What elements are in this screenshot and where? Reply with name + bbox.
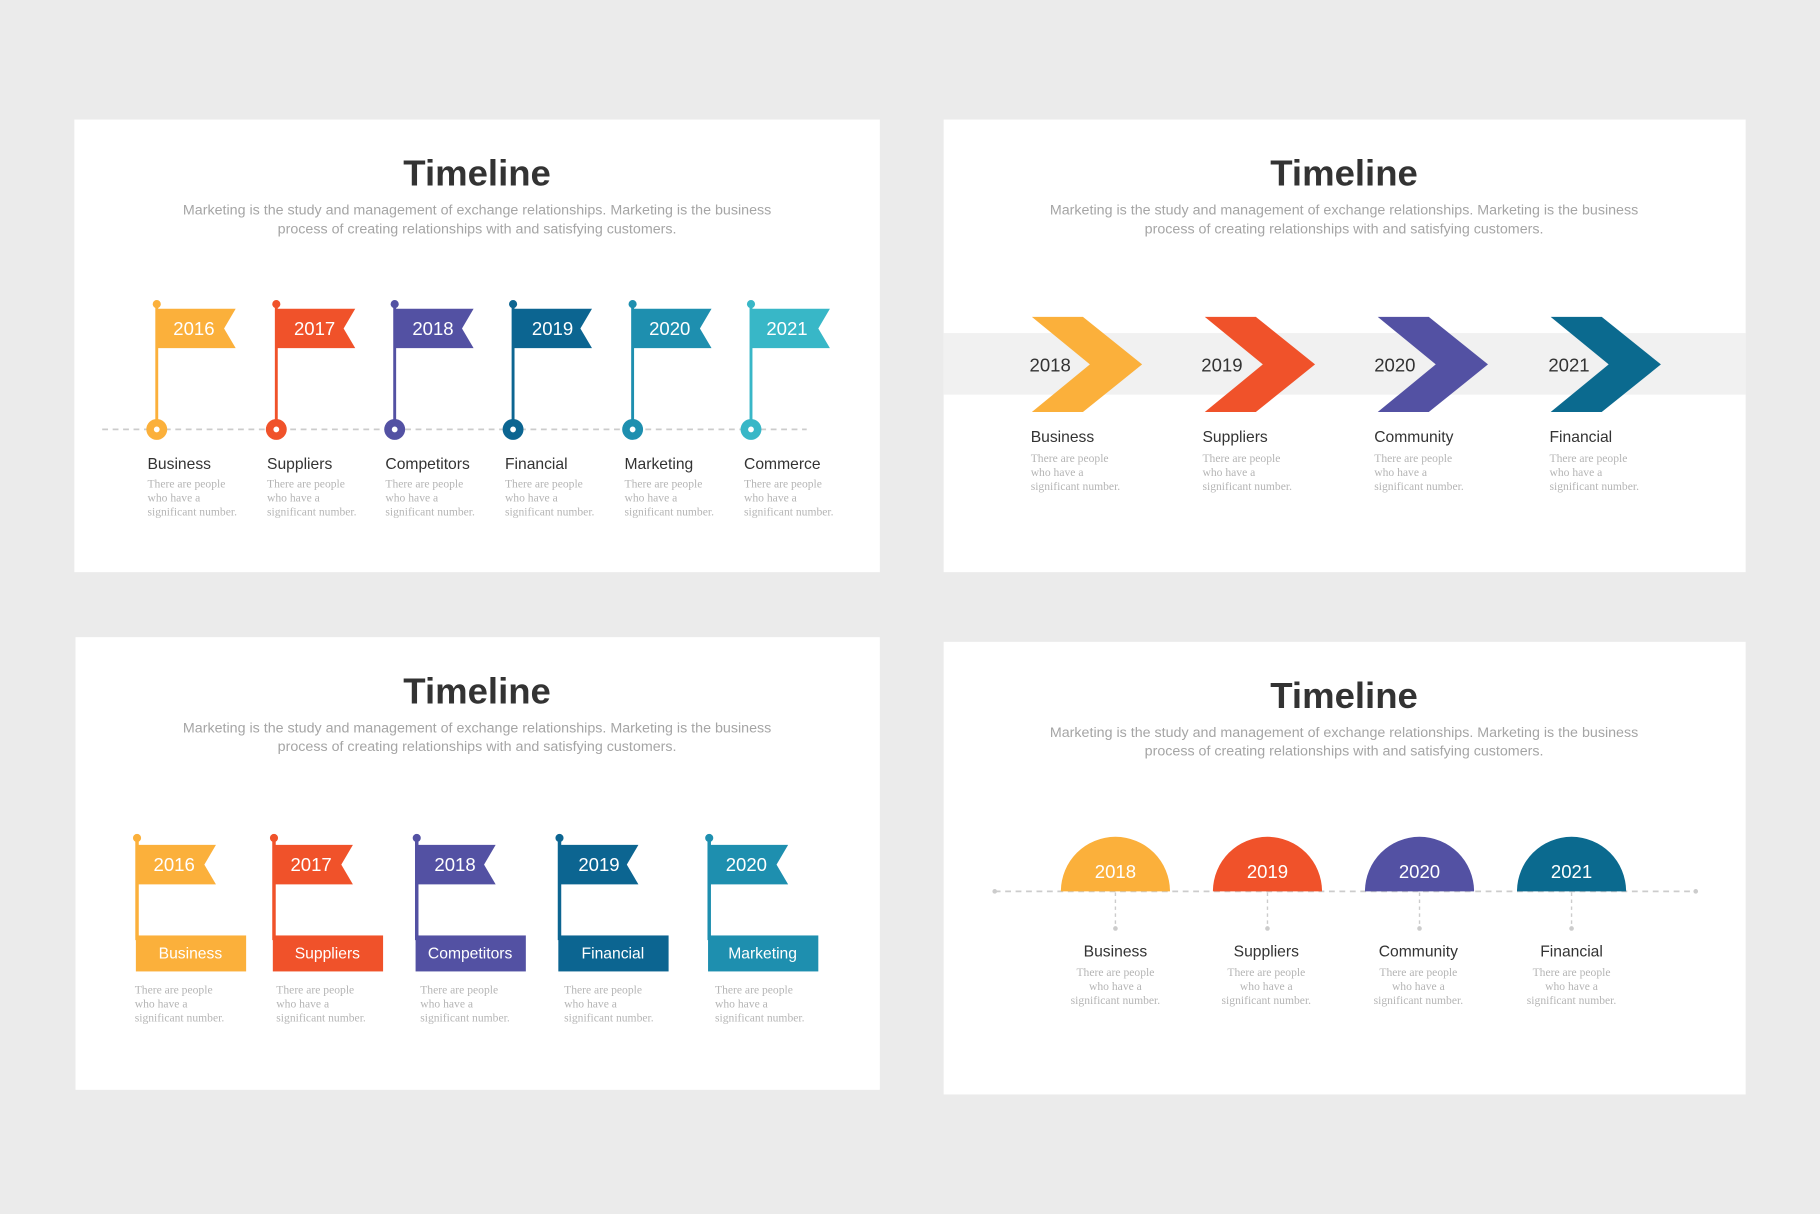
flag box 2020: There are people — [715, 983, 793, 996]
semicircle 2021: 2021 — [1551, 861, 1592, 882]
semicircle 2020 — [1365, 837, 1474, 1007]
flag box 2018 — [413, 834, 526, 1024]
semicircle 2019: Suppliers — [1234, 943, 1299, 960]
flag 2021: significant number. — [744, 505, 834, 518]
flag 2016 — [146, 300, 237, 518]
subtitle: Marketing is the study and management of exchange relationships. Marketing is the business — [183, 203, 771, 219]
flag box 2019 — [555, 834, 669, 1024]
semicircle 2018: who have a — [1089, 980, 1142, 993]
semicircle 2019: significant number. — [1222, 994, 1311, 1007]
chevron 2019: who have a — [1202, 466, 1255, 479]
flag box 2020: Marketing — [728, 946, 797, 963]
semicircle 2019: There are people — [1227, 966, 1305, 979]
flag box 2018: significant number. — [420, 1011, 510, 1024]
semicircle 2019: 2019 — [1247, 861, 1288, 882]
flag 2019: There are people — [505, 477, 583, 490]
flag box 2018: who have a — [420, 997, 473, 1010]
flag box 2017: significant number. — [276, 1011, 366, 1024]
flag box 2016: 2016 — [154, 854, 195, 875]
flag box 2020: significant number. — [715, 1011, 805, 1024]
flag 2021: There are people — [744, 477, 822, 490]
flag box 2016 — [133, 834, 246, 1024]
subtitle — [183, 203, 771, 237]
flag 2019: Financial — [505, 456, 568, 473]
chevron 2021: There are people — [1549, 452, 1627, 465]
flag box 2019: significant number. — [564, 1011, 654, 1024]
flag 2016: 2016 — [173, 318, 215, 339]
flag 2016: who have a — [147, 491, 200, 504]
chevron 2019: Suppliers — [1202, 429, 1268, 446]
flag box 2019: There are people — [564, 983, 642, 996]
flag box 2016: There are people — [135, 983, 213, 996]
semicircle 2018: significant number. — [1071, 994, 1160, 1007]
title: Timeline — [1270, 153, 1418, 194]
flag box 2018: Competitors — [428, 946, 512, 963]
flag 2021 — [741, 300, 834, 518]
chevron 2020: 2020 — [1374, 354, 1416, 375]
subtitle: process of creating relationships with and satisfying customers. — [278, 739, 677, 755]
panel: semicircle timeline — [944, 642, 1746, 1094]
flag 2020: who have a — [624, 491, 677, 504]
flag 2018: Competitors — [385, 456, 470, 473]
panel: flag box timeline — [76, 637, 880, 1090]
flag 2020: There are people — [624, 477, 702, 490]
flag 2018: significant number. — [385, 505, 475, 518]
flag 2016: significant number. — [147, 505, 237, 518]
flag box 2018: 2018 — [434, 854, 476, 875]
semicircle 2021: who have a — [1545, 980, 1598, 993]
flag box 2017 — [270, 834, 383, 1024]
flag 2019 — [503, 300, 595, 518]
flag 2020: significant number. — [624, 505, 714, 518]
chevron 2019: There are people — [1202, 452, 1280, 465]
flag 2021: Commerce — [744, 456, 821, 473]
flag box 2019: who have a — [564, 997, 617, 1010]
chevron 2018 — [1030, 317, 1142, 493]
flag 2021: who have a — [744, 491, 797, 504]
semicircle 2021: Financial — [1540, 943, 1603, 960]
semicircle 2021: significant number. — [1527, 994, 1616, 1007]
panel: chevron timeline — [944, 120, 1746, 572]
flag 2020 — [622, 300, 714, 518]
flag box 2017: There are people — [276, 983, 354, 996]
chevron 2018: who have a — [1031, 466, 1084, 479]
flag box 2020 — [705, 834, 818, 1024]
flag box 2016: who have a — [135, 997, 188, 1010]
flag box 2017: Suppliers — [295, 946, 360, 963]
flag 2017: 2017 — [294, 318, 335, 339]
subtitle: process of creating relationships with and satisfying customers. — [1145, 744, 1543, 760]
title: Timeline — [403, 153, 551, 194]
subtitle: process of creating relationships with and satisfying customers. — [1145, 221, 1543, 237]
chevron 2018: 2018 — [1030, 354, 1071, 375]
semicircle 2019 — [1213, 837, 1322, 1007]
flag 2018: 2018 — [412, 318, 454, 339]
flag box 2016: Business — [159, 946, 222, 963]
subtitle — [1050, 203, 1638, 237]
semicircle 2018: Business — [1084, 943, 1147, 960]
flag 2019: who have a — [505, 491, 558, 504]
flag 2016: There are people — [147, 477, 225, 490]
flag 2017: There are people — [267, 477, 345, 490]
flag 2018: There are people — [385, 477, 463, 490]
semicircle 2020: who have a — [1392, 980, 1445, 993]
chevron 2019: 2019 — [1201, 354, 1243, 375]
semicircle 2018: There are people — [1076, 966, 1154, 979]
flag 2020: Marketing — [624, 456, 693, 473]
chevron 2020: There are people — [1374, 452, 1452, 465]
flag box 2020: who have a — [715, 997, 768, 1010]
panel: flag timeline — [74, 120, 880, 572]
title: Timeline — [1270, 675, 1418, 716]
semicircle 2019: who have a — [1240, 980, 1293, 993]
chevron 2018: significant number. — [1031, 480, 1120, 493]
flag 2017: who have a — [267, 491, 320, 504]
flag box 2017: 2017 — [290, 854, 332, 875]
semicircle 2020: There are people — [1379, 966, 1457, 979]
flag 2021: 2021 — [766, 318, 808, 339]
flag box 2019: Financial — [582, 946, 644, 963]
chevron 2021: significant number. — [1549, 480, 1639, 493]
chevron 2020: who have a — [1374, 466, 1427, 479]
chevron 2021: who have a — [1549, 466, 1602, 479]
flag 2017: Suppliers — [267, 456, 332, 473]
subtitle: Marketing is the study and management of exchange relationships. Marketing is the business — [1050, 203, 1638, 219]
chevron 2021: 2021 — [1548, 354, 1590, 375]
chevron 2018: Business — [1031, 429, 1094, 446]
chevron 2019 — [1201, 317, 1315, 493]
chevron 2020: Community — [1374, 429, 1454, 446]
chevron 2020: significant number. — [1374, 480, 1464, 493]
flag box 2019: 2019 — [578, 854, 620, 875]
semicircle 2018 — [1061, 837, 1170, 1007]
semicircle 2021 — [1517, 837, 1626, 1007]
subtitle — [1050, 725, 1638, 760]
flag 2018 — [384, 300, 475, 518]
subtitle: Marketing is the study and management of exchange relationships. Marketing is the business — [183, 720, 771, 736]
subtitle: Marketing is the study and management of exchange relationships. Marketing is the business — [1050, 725, 1638, 741]
flag 2019: significant number. — [505, 505, 595, 518]
semicircle 2020: significant number. — [1374, 994, 1463, 1007]
subtitle — [183, 720, 771, 755]
title: Timeline — [403, 670, 551, 711]
flag 2018: who have a — [385, 491, 438, 504]
semicircle 2020: Community — [1379, 943, 1458, 960]
flag 2019: 2019 — [532, 318, 573, 339]
flag 2017: significant number. — [267, 505, 357, 518]
semicircle 2021: There are people — [1533, 966, 1610, 979]
flag 2016: Business — [147, 456, 211, 473]
flag 2017 — [266, 300, 357, 518]
chevron 2021: Financial — [1549, 429, 1612, 446]
flag 2020: 2020 — [649, 318, 690, 339]
semicircle 2020: 2020 — [1399, 861, 1440, 882]
flag box 2016: significant number. — [135, 1011, 224, 1024]
chevron 2018: There are people — [1031, 452, 1109, 465]
flag box 2017: who have a — [276, 997, 329, 1010]
flag box 2020: 2020 — [726, 854, 767, 875]
semicircle 2018: 2018 — [1095, 861, 1136, 882]
chevron 2019: significant number. — [1202, 480, 1292, 493]
flag box 2018: There are people — [420, 983, 498, 996]
subtitle: process of creating relationships with and satisfying customers. — [278, 221, 677, 237]
chevron 2021 — [1548, 317, 1661, 493]
chevron 2020 — [1374, 317, 1488, 493]
